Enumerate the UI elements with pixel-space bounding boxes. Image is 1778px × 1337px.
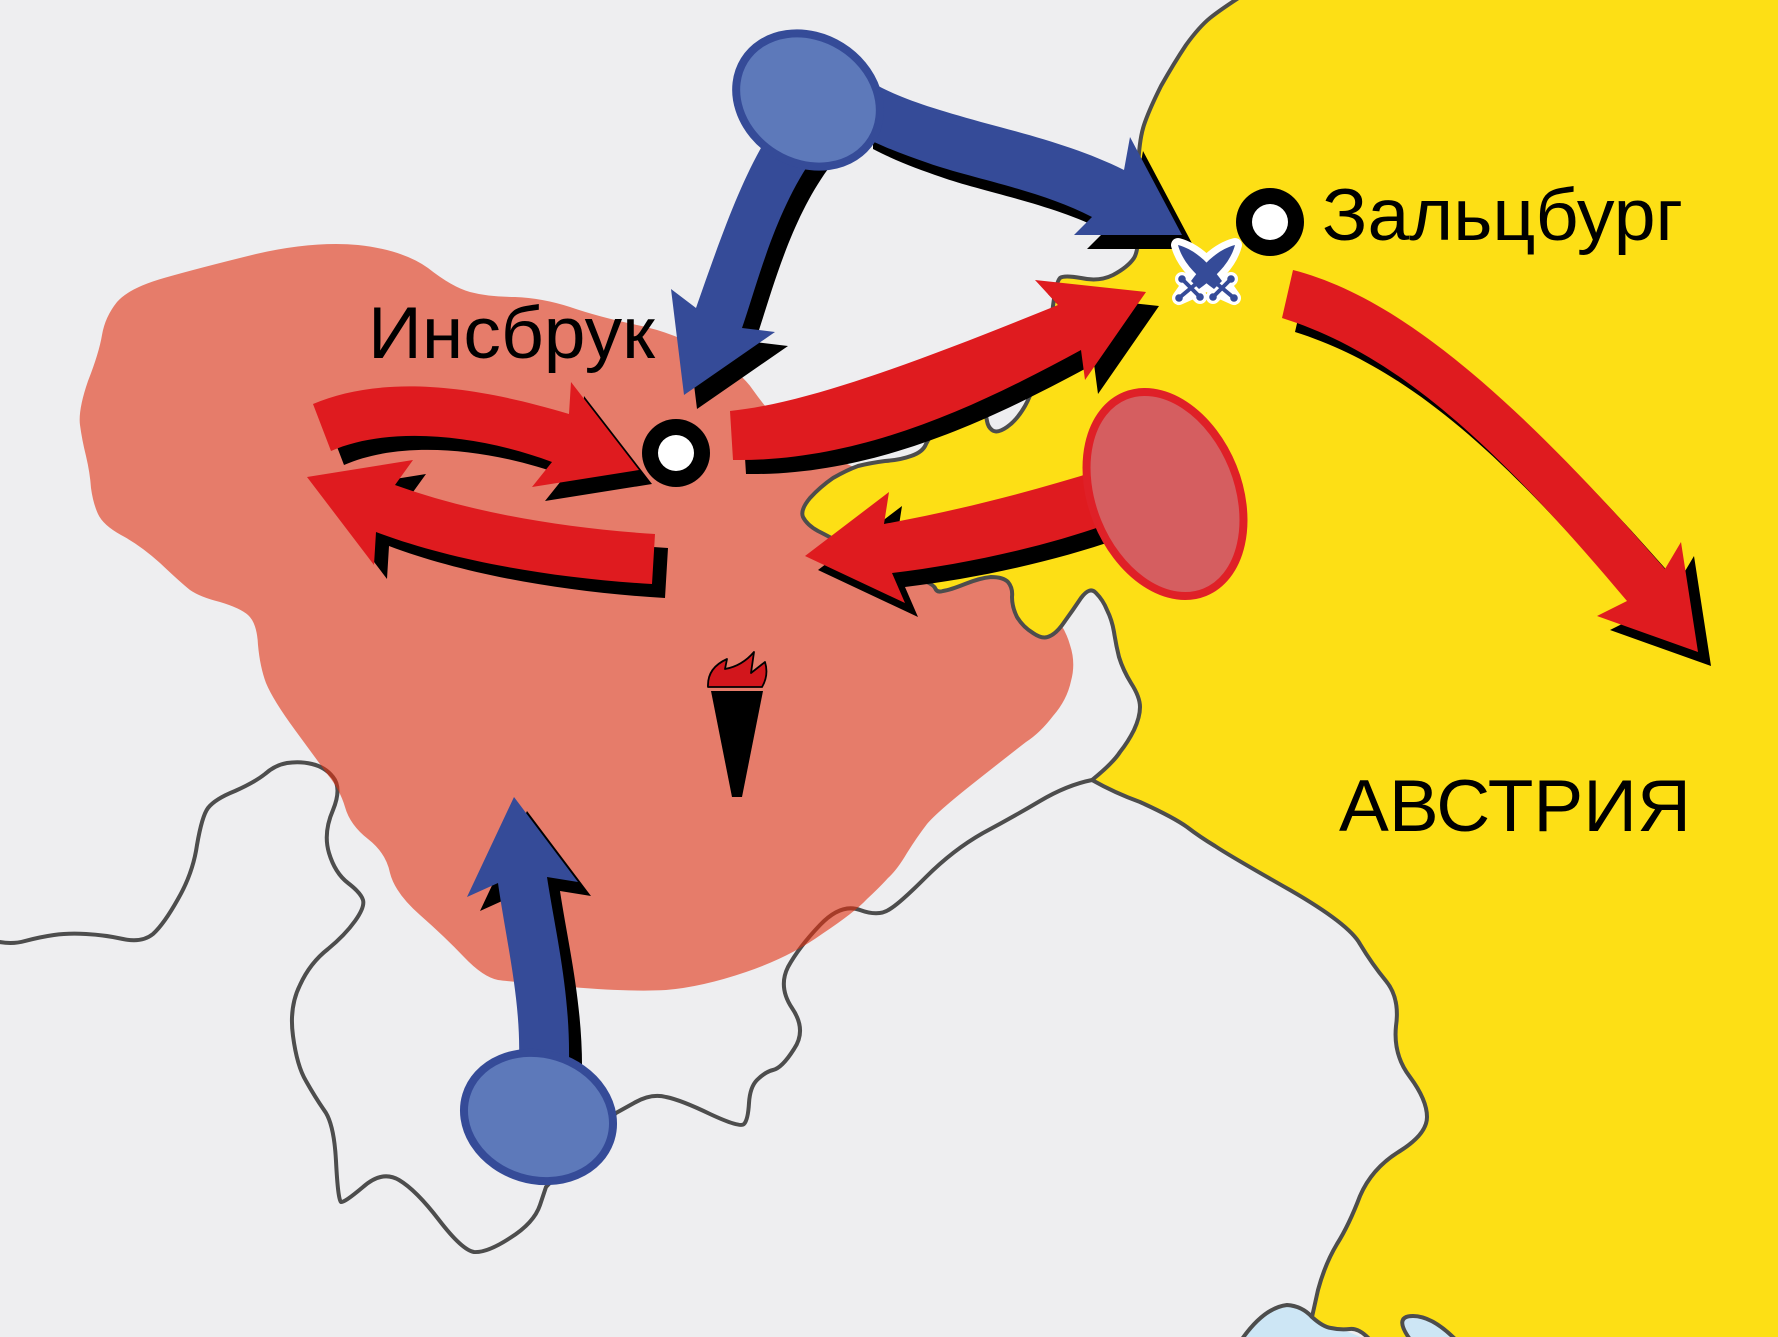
staging area: blue oval north bbox=[711, 7, 905, 193]
staging area: blue oval south bbox=[448, 1035, 629, 1199]
arrow: blue from north to Salzburg bbox=[860, 75, 1195, 249]
region: Austria bbox=[802, 0, 1778, 1337]
region: Tyrol uprising area bbox=[80, 244, 1073, 991]
southern border line bbox=[0, 762, 1092, 1252]
icon: torch bbox=[708, 652, 766, 797]
arrow: red to Innsbruck from west bbox=[313, 382, 652, 501]
label: Innsbruck: Инсбрук bbox=[368, 293, 656, 374]
staging area: red oval bbox=[1058, 368, 1272, 620]
water: lakes at the bottom bbox=[1238, 1305, 1470, 1337]
arrow: red from Salzburg to south-east bbox=[1282, 270, 1711, 666]
arrow: blue from north to Innsbruck bbox=[671, 120, 828, 409]
label: Austria: АВСТРИЯ bbox=[1339, 766, 1691, 847]
arrow: red from Innsbruck to Salzburg bbox=[730, 280, 1159, 474]
city marker: Innsbruck bbox=[642, 419, 710, 487]
arrow: red from Innsbruck to west bbox=[307, 460, 668, 598]
label: Salzburg: Зальцбург bbox=[1322, 175, 1683, 256]
arrow: blue from south into Tyrol bbox=[467, 797, 591, 1074]
icon: crossed swords battle bbox=[1175, 245, 1238, 302]
city marker: Salzburg bbox=[1236, 188, 1304, 256]
arrow: red from oval to Tyrol bbox=[805, 470, 1118, 617]
